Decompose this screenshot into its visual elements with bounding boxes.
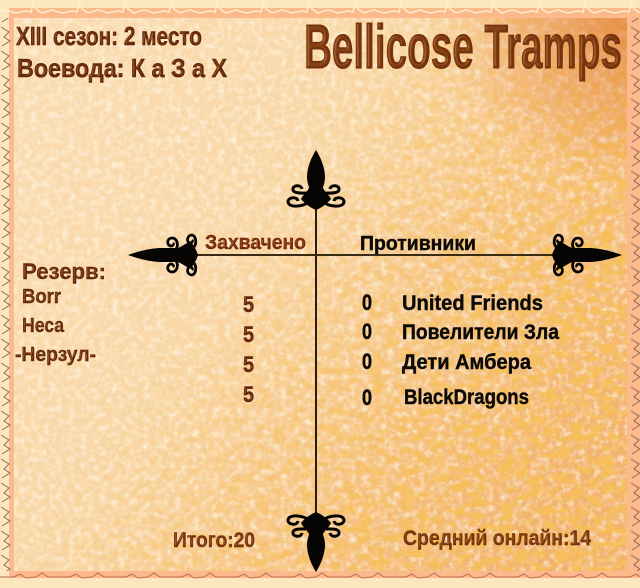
captured scores: 5 bbox=[243, 322, 254, 347]
captured scores: 5 bbox=[243, 292, 254, 317]
captured scores: 5 bbox=[243, 352, 254, 377]
total: Итого:20 bbox=[173, 529, 255, 552]
opponent scores bbox=[362, 290, 372, 410]
opponent names: United Friends bbox=[402, 292, 543, 315]
opponent scores: 0 bbox=[362, 385, 372, 410]
reserve list: Borr bbox=[22, 286, 61, 308]
reserve list: Неса bbox=[22, 315, 65, 337]
opponent scores: 0 bbox=[362, 290, 372, 315]
opponent scores: 0 bbox=[362, 319, 372, 344]
season and leader text: XIII сезон: 2 место bbox=[16, 21, 202, 51]
opponent names: BlackDragons bbox=[404, 386, 529, 409]
season and leader text: Воевода: К а З а Х bbox=[17, 53, 228, 83]
reserve list bbox=[15, 259, 106, 366]
heading: captured: Захвачено bbox=[205, 232, 306, 254]
reserve list: Резерв: bbox=[22, 259, 106, 284]
opponent names: Повелители Зла bbox=[402, 321, 559, 344]
opponent scores: 0 bbox=[362, 349, 372, 374]
icon: left fleur bbox=[128, 235, 198, 275]
icon: right fleur bbox=[552, 235, 622, 275]
reserve list: -Нерзул- bbox=[15, 344, 96, 366]
heading: opponents: Противники bbox=[360, 233, 476, 255]
average online: Средний онлайн:14 bbox=[403, 527, 591, 550]
cross with ornaments bbox=[128, 150, 622, 572]
captured scores: 5 bbox=[243, 382, 254, 407]
icon: bottom fleur bbox=[288, 512, 344, 572]
opponent names: Дети Амбера bbox=[402, 351, 531, 374]
captured scores bbox=[243, 292, 254, 407]
season and leader text bbox=[16, 21, 228, 83]
opponent names bbox=[402, 292, 559, 409]
icon: top fleur bbox=[288, 150, 344, 210]
